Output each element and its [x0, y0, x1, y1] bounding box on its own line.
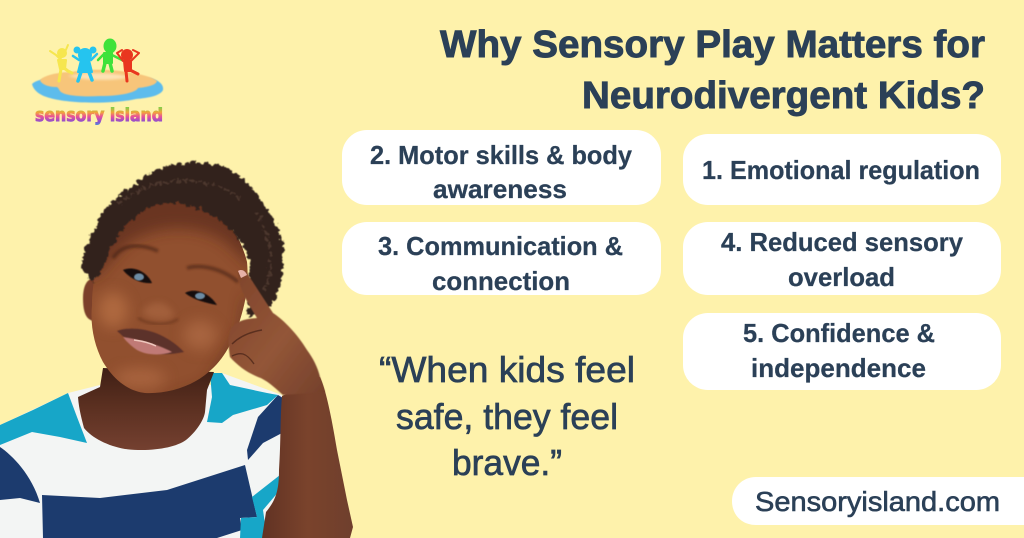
left eye [123, 269, 152, 283]
hair [81, 162, 284, 318]
ear [83, 278, 99, 321]
logo child yellow [50, 45, 72, 81]
item 2: motor skills: 2. Motor skills & body [370, 140, 633, 170]
website badge [732, 477, 1024, 525]
item 3: communication [342, 222, 661, 296]
finger nail [238, 270, 247, 278]
logo child red [117, 49, 139, 81]
eyebrows [113, 246, 158, 258]
item 5: confidence: independence [751, 353, 926, 383]
item 4: reduced sensory overload: overload [788, 262, 895, 292]
item 4: reduced sensory overload: 4. Reduced sensory [721, 227, 964, 257]
title line 1: Why Sensory Play Matters for [440, 24, 985, 66]
item 1: emotional regulation [683, 134, 1001, 205]
knuckle creases [232, 330, 262, 364]
item 3: communication: 3. Communication & [378, 231, 623, 261]
quote: “When kids feel [379, 349, 635, 390]
forehead shade [94, 201, 248, 282]
face [92, 200, 248, 394]
title [440, 24, 985, 117]
logo island [40, 70, 157, 96]
jaw shade [204, 298, 246, 375]
shirt navy sleeve [247, 395, 283, 460]
website badge: Sensoryisland.com [755, 486, 1000, 517]
right eye [185, 291, 217, 305]
arm [262, 377, 353, 538]
neck [78, 368, 214, 450]
item 2: motor skills [342, 130, 661, 205]
shirt navy left [0, 447, 40, 503]
quote: safe, they feel [396, 396, 618, 437]
shirt teal right shoulder [207, 373, 278, 423]
logo wordmark: sensory island [35, 105, 163, 126]
item 5: confidence: 5. Confidence & [743, 318, 935, 348]
cheek highlights [98, 292, 128, 328]
shirt base [0, 373, 282, 538]
logo child blue [73, 46, 97, 81]
logo water [32, 78, 163, 103]
shirt teal sleeve hem [240, 475, 280, 538]
item 2: motor skills: awareness [433, 174, 567, 204]
mouth [117, 329, 184, 354]
item 4: reduced sensory overload [683, 222, 1001, 295]
item 1: emotional regulation: 1. Emotional regulation [702, 155, 980, 185]
quote [379, 349, 635, 483]
shirt navy band [42, 465, 257, 538]
title line 2: Neurodivergent Kids? [582, 75, 985, 117]
logo: sensory island [32, 38, 163, 126]
logo child green [98, 38, 122, 71]
nose [144, 303, 172, 320]
quote: brave.” [452, 442, 562, 483]
hair texture [120, 180, 270, 293]
item 3: communication: connection [432, 266, 570, 296]
photo: smiling boy pointing at his temple [0, 162, 353, 538]
item 5: confidence [683, 313, 1001, 390]
hand and fist [229, 270, 325, 395]
shirt teal left shoulder [0, 393, 87, 445]
